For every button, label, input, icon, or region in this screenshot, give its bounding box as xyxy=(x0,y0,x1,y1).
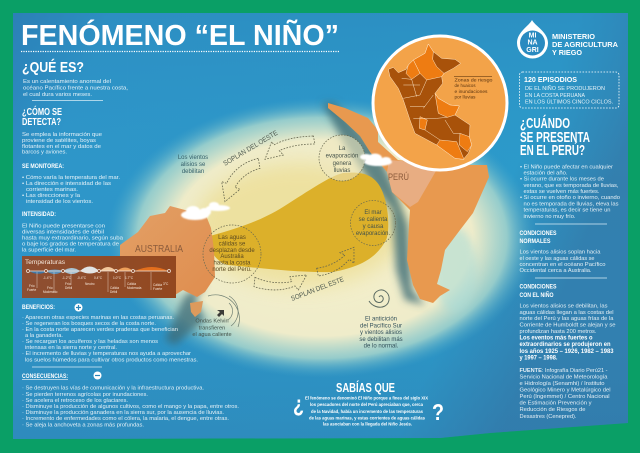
panel: cuándo se presenta: estas se vuelven más fuertes. xyxy=(524,189,600,195)
panel: consecuencias: · Incremento de enfermedades como el cólera, la malaria, el dengue, entre otras. xyxy=(22,416,229,422)
logo: Minagri: MI xyxy=(529,32,536,40)
panel: condiciones normales xyxy=(520,231,607,278)
temperature labels: -1.4°C xyxy=(43,276,53,280)
panel: cómo se detecta: flotantes en el mar y datos de xyxy=(22,144,102,150)
label: vientos alisios xyxy=(178,155,208,175)
panel: cuándo se presenta: EN EL PERÚ? xyxy=(520,141,585,159)
temperature labels: Frío xyxy=(47,286,53,290)
circle: las aguas cálidas: Australia xyxy=(220,254,244,260)
temperature labels: Débil xyxy=(65,286,73,290)
circle: el mar se calienta xyxy=(350,200,396,246)
circle: el mar se calienta: evaporación. xyxy=(356,231,391,237)
panel: consecuencias: · Se aleja la anchoveta a zonas más profundas. xyxy=(22,422,144,428)
temperature labels: -0.4°C xyxy=(77,276,87,280)
panel: condiciones con el niño: Corriente de Humboldt se alejan y se xyxy=(520,322,616,328)
wind arrows xyxy=(222,136,354,290)
temperature labels: 1.0°C xyxy=(113,276,122,280)
Peru risk map inset xyxy=(373,36,507,170)
panel: cuándo se presenta xyxy=(520,115,621,224)
source text: Servicio Nacional de Meteorología xyxy=(520,374,608,380)
legend: risk zones: e inundaciones xyxy=(454,89,488,94)
source text: Reducción de Riesgos de xyxy=(520,407,586,413)
circle: las aguas cálidas: cálidas se xyxy=(219,242,246,248)
panel: condiciones con el niño: CON EL NIÑO xyxy=(520,292,554,299)
anticyclone spiral and text: y vientos alisios xyxy=(360,330,402,336)
panel: condiciones con el niño: Los eventos más fuertes o xyxy=(520,336,593,342)
panel: cuándo se presenta: • Si ocurre en otoño o invierno, cuando xyxy=(520,195,621,201)
arrow: east wind 2 xyxy=(317,247,354,276)
panel: condiciones normales: el oeste y las aguas cálidas se xyxy=(520,256,595,262)
legend: risk zones xyxy=(454,76,493,100)
panel: condiciones con el niño xyxy=(520,285,616,362)
source text: e Hidrología (Senamhi) / Instituto xyxy=(520,381,605,387)
logo: Minagri: GRI xyxy=(526,47,539,54)
panel: condiciones con el niño: aguas cálidas llegan a las costas del xyxy=(520,310,614,316)
temperature labels: Frío xyxy=(29,284,35,288)
panel: condiciones normales: NORMALES xyxy=(520,239,550,245)
source text xyxy=(520,368,610,420)
logo: Minagri: DE AGRICULTURA xyxy=(552,42,618,49)
temperature humps xyxy=(29,266,168,274)
temperature labels: Cálida xyxy=(127,282,136,286)
title: FENÓMENO “EL NIÑO” xyxy=(21,20,339,52)
panel: condiciones normales: CONDICIONES xyxy=(520,231,556,237)
panel: cuándo se presenta: • El Niño puede afectar en cualquier xyxy=(520,164,613,170)
panel: consecuencias: · Disminuye la producción de algunos cultivos, como el mango y la papa, entre otros. xyxy=(22,404,239,410)
panel: qué es: océano Pacífico frente a nuestra costa, xyxy=(23,86,128,92)
panel: cómo se detecta: ¿CÓMO SE xyxy=(22,105,62,118)
panel: qué es xyxy=(22,59,128,100)
arrow: west wind 2 xyxy=(222,158,260,202)
panel: cuándo se presenta: temperaturas, es decir se tiene un xyxy=(524,208,610,214)
temperature scale panel: Temperaturas xyxy=(25,259,66,266)
temperature labels: Neutro xyxy=(85,282,95,286)
panel: intensidad xyxy=(22,212,124,254)
logo: Minagri: Y RIEGO xyxy=(552,50,583,57)
temperature scale panel xyxy=(22,256,176,298)
panel: beneficios: · Aparecen otras especies marinas en las costas peruanas. xyxy=(22,315,174,321)
panel: beneficios: BENEFICIOS: xyxy=(22,305,55,311)
panel: consecuencias: · Se destruyen las vías de comunicación y la infraestructura productiva. xyxy=(22,386,204,392)
panel: intensidad: la superficie del mar. xyxy=(22,248,76,254)
icon: opening question mark: ¿ xyxy=(293,391,304,417)
panel: cuándo se presenta: verano, que es temporada de lluvias, xyxy=(524,183,619,189)
panel: condiciones normales: Occidental cerca a Australia. xyxy=(520,268,592,274)
circle: el mar se calienta: se calienta xyxy=(359,217,388,223)
temperature labels: Fuerte xyxy=(27,288,36,292)
circle: la evaporación xyxy=(319,135,365,181)
arrow: west wind 1 xyxy=(265,136,315,159)
logo: Minagri: NA xyxy=(527,40,538,46)
panel: intensidad: o baje los grados de temperatura de xyxy=(22,242,120,248)
circle: las aguas cálidas: Las aguas xyxy=(218,235,246,241)
icon: closing question mark: ? xyxy=(432,399,444,425)
panel: qué es: ¿QUÉ ES? xyxy=(22,59,84,76)
icon: minus xyxy=(94,372,102,380)
warm water zone xyxy=(209,173,388,272)
callout: 120 episodios xyxy=(520,72,619,108)
label: Perú: PERÚ xyxy=(388,172,409,183)
panel: qué es: Es un calentamiento anormal del xyxy=(23,79,111,85)
label: Australia: AUSTRALIA xyxy=(135,244,183,255)
panel: cuándo se presenta: no es temporada de lluvias, eleva las xyxy=(524,202,619,208)
panel: condiciones con el niño: CONDICIONES xyxy=(520,285,556,291)
temperature labels xyxy=(27,276,169,294)
panel: intensidad: diversas intensidades de débil xyxy=(22,230,104,236)
Kelvin waves icon and text: Ondas Kelvin xyxy=(195,318,229,324)
Kelvin waves icon and text xyxy=(192,295,239,338)
panel: sabías que: los pescadores del norte del Perú apreciaban que, cerca xyxy=(310,402,423,407)
temperature labels: Cálida xyxy=(110,286,119,290)
panel: beneficios: los suelos húmedos para cultivar otros productos como menestras. xyxy=(25,358,198,364)
cloud: Australia xyxy=(181,202,230,220)
panel: condiciones con el niño: Los vientos alisios se debilitan, las xyxy=(520,304,608,310)
panel: sabías que: de la Navidad, había un incremento de las temperaturas xyxy=(311,409,423,414)
panel: se monitorea xyxy=(22,164,120,205)
circle: el mar se calienta: y causa xyxy=(363,224,384,230)
panel: se monitorea: intensidad de los vientos. xyxy=(26,199,93,205)
Kelvin waves icon and text: el agua caliente xyxy=(192,332,232,338)
panel: cómo se detecta: DETECTA? xyxy=(22,116,61,128)
panel: beneficios: · Se regeneran los bosques secos de la costa norte. xyxy=(22,321,156,327)
panel: se monitorea: • Las direcciones y la xyxy=(22,193,81,199)
anticyclone spiral and text xyxy=(359,290,403,350)
logo: Minagri: MINISTERIO xyxy=(552,34,596,41)
panel: beneficios: · Se recargan los acuíferos y las heladas son menos xyxy=(22,339,158,345)
panel: intensidad: INTENSIDAD: xyxy=(22,212,56,218)
legend: risk zones: por lluvias xyxy=(454,94,476,100)
panel: condiciones con el niño: profundizan hasta 200 metros. xyxy=(520,329,597,335)
panel: consecuencias: · Se pierden terrenos agrícolas por inundaciones. xyxy=(22,392,148,398)
circle: la evaporación: evaporación xyxy=(326,154,358,160)
circle: las aguas cálidas: hasta la costa xyxy=(213,260,251,266)
source text: Geológico Minero y Metalúrgico del xyxy=(520,388,610,394)
temperature labels: 0.4°C xyxy=(94,276,103,280)
panel: cómo se detecta: barcos y aviones. xyxy=(22,150,67,156)
arrow: east wind 1 xyxy=(254,275,307,290)
panel: cuándo se presenta: ¿CUÁNDO xyxy=(520,115,570,132)
panel: se monitorea: • La dirección e intensidad de las xyxy=(22,181,111,187)
panel: consecuencias xyxy=(22,372,239,428)
Kelvin waves icon and text: transfieren xyxy=(199,326,225,332)
source text: Desastres (Cenepred). xyxy=(520,414,577,420)
label: vientos alisios: Los vientos xyxy=(178,155,208,161)
anticyclone spiral and text: El anticición xyxy=(365,316,397,322)
panel: beneficios: a la ganadería. xyxy=(25,333,63,339)
temperature labels: Frío xyxy=(65,282,71,286)
circle: las aguas cálidas: norte del Perú. xyxy=(212,267,252,273)
panel: condiciones con el niño: y 1997 – 1998. xyxy=(520,356,558,362)
panel: beneficios: · El incremento de lluvias y temperaturas nos ayuda a aprovechar xyxy=(22,351,191,357)
panel: consecuencias: CONSECUENCIAS: xyxy=(22,374,68,380)
source text: de Estimación Prevención y xyxy=(520,400,592,406)
panel: condiciones con el niño: extraordinarios se produjeron en xyxy=(520,342,611,348)
panel: beneficios: intensas en la sierra norte y central. xyxy=(25,345,117,351)
temperature labels: -1.2°C xyxy=(62,276,72,280)
panel: condiciones normales: Los vientos alisios soplan hacia xyxy=(520,250,601,256)
panel: sabías que xyxy=(293,380,444,426)
panel: sabías que: las asociaban con la llegada del Niño Jesús. xyxy=(323,422,412,426)
land shadows xyxy=(165,103,425,345)
panel: cómo se detecta: Se emplea la información que xyxy=(22,132,103,138)
panel: intensidad: El Niño puede presentarse con xyxy=(22,224,105,230)
temperature labels: Fuerte xyxy=(153,287,162,291)
circle: las aguas cálidas xyxy=(203,225,261,283)
label: vientos alisios: debilitan xyxy=(182,169,204,175)
anticyclone spiral and text: del Pacífico Sur xyxy=(360,324,402,330)
circle: el mar se calienta: El mar xyxy=(364,210,382,216)
panel: condiciones con el niño: norte del Perú y las aguas frías de la xyxy=(520,316,614,322)
panel: cuándo se presenta: estación del año. xyxy=(524,170,568,176)
panel: sabías que: El fenómeno se denominó El Niño porque a fines del siglo XIX xyxy=(305,396,429,400)
panel: beneficios: · En la costa norte aparecen verdes praderas que benefician xyxy=(22,327,178,333)
circle: la evaporación: La xyxy=(339,146,346,152)
map: Australia xyxy=(120,206,215,317)
callout: 120 episodios: EN LOS ÚLTIMOS CINCO CICLOS. xyxy=(525,98,613,106)
temperature labels: Moderada xyxy=(127,286,142,290)
temperature labels: 3°C xyxy=(163,282,169,286)
panel: consecuencias: · Disminuye la producción ganadera en la sierra sur, por la ausencia de lluvias. xyxy=(22,410,224,416)
circle: las aguas cálidas: desplazan desde xyxy=(209,248,255,254)
panel: condiciones normales: concentran en el océano Pacífico xyxy=(520,262,606,268)
panel: cuándo se presenta: SE PRESENTA xyxy=(520,130,590,146)
label: soplan del oeste: SOPLAN DEL OESTE xyxy=(222,130,279,168)
panel: consecuencias: · Se acelera el retroceso de los glaciares. xyxy=(22,398,128,404)
panel: sabías que: SABÍAS QUE xyxy=(336,380,395,395)
panel: cuándo se presenta: • Si ocurre durante los meses de xyxy=(520,176,605,182)
legend: risk zones: de huaicos xyxy=(454,83,476,88)
callout: 120 episodios: 120 EPISODIOS xyxy=(524,75,577,84)
circle: la evaporación: lluvias xyxy=(334,168,350,174)
anticyclone spiral and text: se debilitan más xyxy=(359,337,403,343)
panel: cómo se detecta: proviene de satélites, boyas xyxy=(22,138,96,144)
panel: beneficios xyxy=(22,304,198,367)
callout: 120 episodios: DE EL NIÑO SE PRODUJERON xyxy=(525,85,605,92)
icon: plus xyxy=(74,304,82,312)
label: soplan del este: SOPLAN DEL ESTE xyxy=(290,276,345,303)
temperature labels: Moderado xyxy=(43,290,58,294)
panel: se monitorea: corrientes marinas. xyxy=(26,187,78,193)
circle: la evaporación: genera xyxy=(333,161,352,167)
panel: intensidad: hasta muy extraordinario, según suba xyxy=(22,236,124,242)
panel: se monitorea: • Cómo varía la temperatura del mar. xyxy=(22,175,120,181)
panel: qué es: el cual dura varios meses. xyxy=(23,92,92,98)
panel: cómo se detecta xyxy=(22,105,103,156)
map: South America xyxy=(328,103,489,303)
anticyclone spiral and text: de lo normal. xyxy=(364,344,399,350)
label: vientos alisios: alisios se xyxy=(181,162,206,168)
temperature labels: 1.7°C xyxy=(125,276,134,280)
source text: FUENTE: Infografía Diario Perú21 - xyxy=(520,368,608,374)
source text: Perú (Ingemmet) / Centro Nacional xyxy=(520,394,610,400)
panel: se monitorea: SE MONITOREA: xyxy=(22,164,64,170)
cloud: Perú xyxy=(360,154,392,166)
map of Peru regions xyxy=(388,44,472,159)
legend: risk zones: Zonas de riesgo xyxy=(454,78,493,82)
panel: cuándo se presenta: invierno no muy frío. xyxy=(524,214,576,220)
panel: condiciones con el niño: los años 1925 – 1926, 1982 – 1983 xyxy=(520,349,614,355)
temperature labels: Débil xyxy=(110,290,118,294)
panel: sabías que: de las aguas marinas, y estas corrientes de aguas cálidas xyxy=(309,416,425,420)
temperature labels: Cálida xyxy=(153,283,162,287)
callout: 120 episodios: EN LA COSTA PERUANA xyxy=(525,93,585,99)
logo: Minagri xyxy=(517,20,618,58)
temperature axis xyxy=(26,270,170,292)
